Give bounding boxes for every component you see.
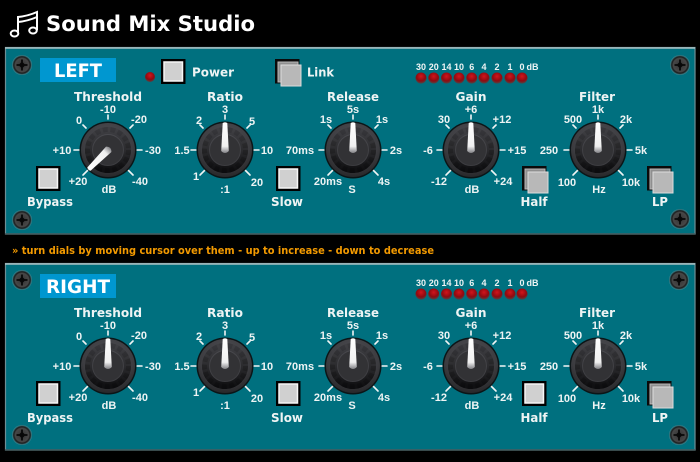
level meter: 6 <box>469 62 474 72</box>
icon: music notes <box>11 12 37 36</box>
gain dial: Gain <box>456 305 486 320</box>
gain dial: +24 <box>494 176 513 188</box>
threshold dial: -10 <box>100 104 116 116</box>
level meter: 4 <box>481 62 487 72</box>
level meter: 30 <box>416 278 426 288</box>
filter dial <box>540 305 648 412</box>
threshold dial: -20 <box>131 114 147 126</box>
release dial: 20ms <box>314 392 342 404</box>
ratio dial: Ratio <box>207 305 243 320</box>
threshold dial: -40 <box>132 392 148 404</box>
threshold dial: +20 <box>69 392 87 404</box>
release dial: 1s <box>320 114 332 126</box>
release dial: S <box>348 184 356 196</box>
half button: Half <box>520 410 548 425</box>
panel: right channel <box>5 264 695 450</box>
ratio dial: 20 <box>251 177 263 189</box>
gain dial: +12 <box>493 330 511 342</box>
threshold dial <box>53 89 161 196</box>
release dial: 70ms <box>286 145 314 157</box>
release dial: 4s <box>378 176 390 188</box>
threshold dial: Threshold <box>74 89 142 104</box>
threshold dial: -30 <box>145 361 161 373</box>
filter dial: 2k <box>620 330 633 342</box>
release dial: 1s <box>376 330 388 342</box>
ratio dial: :1 <box>220 184 230 196</box>
filter dial: 250 <box>540 361 558 373</box>
level meter: dB <box>526 62 539 72</box>
filter dial: 1k <box>592 320 605 332</box>
bypass button <box>27 381 73 425</box>
level meter: 0 <box>519 62 525 72</box>
gain dial: Gain <box>456 89 486 104</box>
level meter: 4 <box>481 278 487 288</box>
ratio dial: 1 <box>193 171 199 183</box>
ratio dial: 1.5 <box>174 361 190 373</box>
ratio dial: :1 <box>220 400 230 412</box>
release dial: 1s <box>320 330 332 342</box>
filter dial: Hz <box>592 400 606 412</box>
threshold dial: -10 <box>100 320 116 332</box>
release dial: 5s <box>347 320 359 332</box>
gain dial: +12 <box>493 114 511 126</box>
bypass button <box>27 166 73 209</box>
level meter: 20 <box>429 62 439 72</box>
filter dial: Filter <box>579 89 616 104</box>
filter dial: Filter <box>579 305 616 320</box>
threshold dial: Threshold <box>74 305 142 320</box>
gain dial: 30 <box>438 114 450 126</box>
channel label: LEFT <box>40 58 116 82</box>
ratio dial <box>174 305 273 412</box>
filter dial: 5k <box>635 145 648 157</box>
level meter: 1 <box>507 278 513 288</box>
lp button: LP <box>652 194 668 209</box>
gain dial: -6 <box>423 361 433 373</box>
gain dial: -6 <box>423 145 433 157</box>
threshold dial: 0 <box>76 331 82 343</box>
half button <box>520 381 548 425</box>
gain dial <box>423 305 526 412</box>
filter dial: 5k <box>635 361 648 373</box>
filter dial: 100 <box>558 393 576 405</box>
lp button: LP <box>652 410 668 425</box>
ratio dial: 2 <box>196 115 202 127</box>
gain dial: 30 <box>438 330 450 342</box>
gain dial: -12 <box>431 176 447 188</box>
screws <box>12 270 689 445</box>
release dial <box>286 305 402 412</box>
filter dial: 10k <box>622 177 641 189</box>
ratio dial: Ratio <box>207 89 243 104</box>
release dial: 70ms <box>286 361 314 373</box>
slow button <box>271 166 303 209</box>
release dial: 5s <box>347 104 359 116</box>
filter dial: 2k <box>620 114 633 126</box>
filter dial: 10k <box>622 393 641 405</box>
level meter: 0 <box>519 278 525 288</box>
bypass button: Bypass <box>27 194 73 209</box>
release dial <box>286 89 402 196</box>
level meter: 14 <box>441 62 452 72</box>
threshold dial: +10 <box>53 361 71 373</box>
gain dial: +6 <box>465 320 477 332</box>
ratio dial: 2 <box>196 331 202 343</box>
filter dial: 100 <box>558 177 576 189</box>
slow button: Slow <box>271 194 303 209</box>
threshold dial: 0 <box>76 115 82 127</box>
channel label: RIGHT: RIGHT <box>46 276 110 298</box>
release dial: Release <box>327 89 379 104</box>
instruction text: » turn dials by moving cursor over them - up to increase - down to decrease <box>12 245 434 257</box>
slow button: Slow <box>271 410 303 425</box>
filter dial: 500 <box>564 114 582 126</box>
level meter: 2 <box>494 62 500 72</box>
release dial: Release <box>327 305 379 320</box>
ratio dial: 3 <box>222 320 228 332</box>
level meter: 20 <box>429 278 439 288</box>
gain dial: +24 <box>494 392 513 404</box>
level meter <box>416 62 539 84</box>
power button <box>161 59 186 84</box>
title: Sound Mix Studio <box>46 12 255 37</box>
slow button <box>271 381 303 425</box>
level meter: 10 <box>454 62 464 72</box>
lp button <box>647 166 673 209</box>
release dial: 20ms <box>314 176 342 188</box>
ratio dial: 20 <box>251 393 263 405</box>
threshold dial: dB <box>102 400 116 412</box>
half button: Half <box>520 194 548 209</box>
filter dial <box>540 89 648 196</box>
gain dial: dB <box>465 184 479 196</box>
ratio dial: 10 <box>261 145 273 157</box>
ratio dial: 1 <box>193 387 199 399</box>
release dial: 2s <box>390 145 402 157</box>
release dial: 1s <box>376 114 388 126</box>
threshold dial: -30 <box>145 145 161 157</box>
gain dial: +6 <box>465 104 477 116</box>
channel label: LEFT: LEFT <box>54 60 102 82</box>
panel: left channel <box>5 48 695 234</box>
release dial: 2s <box>390 361 402 373</box>
level meter: 1 <box>507 62 513 72</box>
threshold dial: +20 <box>69 176 87 188</box>
threshold dial: +10 <box>53 145 71 157</box>
ratio dial: 10 <box>261 361 273 373</box>
filter dial: Hz <box>592 184 606 196</box>
ratio dial: 5 <box>249 332 255 344</box>
release dial: 4s <box>378 392 390 404</box>
link label: Link <box>307 64 335 80</box>
screws <box>12 55 690 230</box>
threshold dial <box>53 305 161 412</box>
threshold dial: -20 <box>131 330 147 342</box>
release dial: S <box>348 400 356 412</box>
threshold dial: dB <box>102 184 116 196</box>
power label: Power <box>192 64 235 80</box>
level meter: 6 <box>469 278 474 288</box>
ratio dial: 1.5 <box>174 145 190 157</box>
level meter: 14 <box>441 278 452 288</box>
threshold dial: -40 <box>132 176 148 188</box>
filter dial: 500 <box>564 330 582 342</box>
half button <box>520 166 548 209</box>
gain dial: +15 <box>508 145 526 157</box>
gain dial: -12 <box>431 392 447 404</box>
ratio dial: 3 <box>222 104 228 116</box>
gain dial: dB <box>465 400 479 412</box>
level meter <box>416 278 539 300</box>
level meter: 30 <box>416 62 426 72</box>
gain dial: +15 <box>508 361 526 373</box>
power led <box>145 72 155 82</box>
level meter: 2 <box>494 278 500 288</box>
gain dial <box>423 89 526 196</box>
lp button <box>647 381 673 425</box>
filter dial: 1k <box>592 104 605 116</box>
ratio dial <box>174 89 273 196</box>
level meter: 10 <box>454 278 464 288</box>
link button <box>275 59 301 86</box>
filter dial: 250 <box>540 145 558 157</box>
ratio dial: 5 <box>249 116 255 128</box>
level meter: dB <box>526 278 539 288</box>
bypass button: Bypass <box>27 410 73 425</box>
title bar <box>11 12 255 37</box>
